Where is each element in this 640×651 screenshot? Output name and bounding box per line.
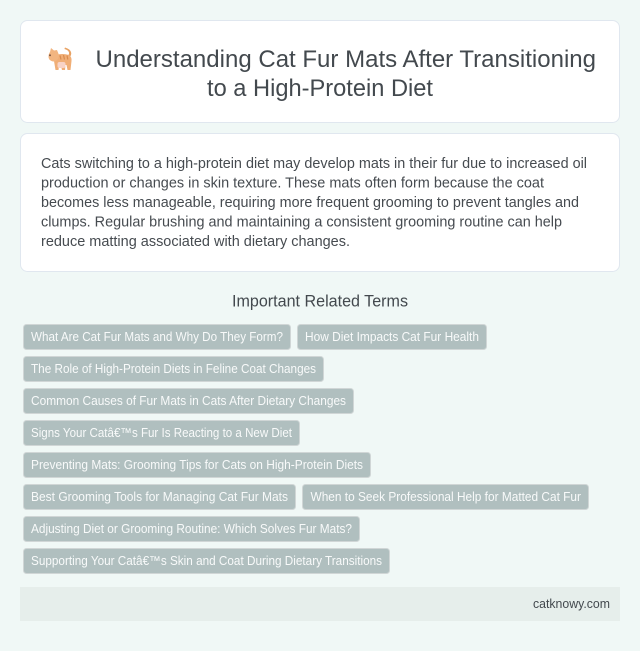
chip <box>24 548 390 574</box>
paragraph text: production or changes in skin texture. These mats often form because the coat <box>41 176 544 192</box>
footer bar <box>20 587 620 621</box>
chip: Supporting Your Catâ€™s Skin and Coat During Dietary Transitions <box>31 554 382 568</box>
paragraph text: clumps. Regular brushing and maintaining a consistent grooming routine can help <box>41 214 562 230</box>
title text: to a High-Protein Diet <box>207 75 433 102</box>
panel: title card <box>20 20 620 122</box>
panel: summary paragraph <box>20 134 620 272</box>
chip <box>24 356 324 382</box>
chip <box>24 484 296 510</box>
chip <box>24 324 290 350</box>
chip: How Diet Impacts Cat Fur Health <box>305 330 479 344</box>
paragraph text: reduce matting associated with dietary changes. <box>41 234 350 250</box>
chip: When to Seek Professional Help for Matted Cat Fur <box>310 490 581 504</box>
chip: Common Causes of Fur Mats in Cats After Dietary Changes <box>31 394 346 408</box>
chip <box>24 388 354 414</box>
title text <box>96 46 596 102</box>
chip <box>24 516 360 542</box>
paragraph text: Cats switching to a high-protein diet may develop mats in their fur due to increased oil <box>41 156 587 172</box>
chip <box>24 420 300 446</box>
chip: Signs Your Catâ€™s Fur Is Reacting to a New Diet <box>31 426 292 440</box>
chip <box>302 484 588 510</box>
chip: Best Grooming Tools for Managing Cat Fur Mats <box>31 490 288 504</box>
icon: cat <box>48 48 72 70</box>
chip <box>24 452 370 478</box>
paragraph text: becomes less manageable, requiring more frequent grooming to prevent tangles and <box>41 195 579 211</box>
title text: Understanding Cat Fur Mats After Transitioning <box>96 46 596 73</box>
footer site name: catknowy.com <box>533 597 610 611</box>
heading: important related terms: Important Related Terms <box>232 292 408 310</box>
chip: The Role of High-Protein Diets in Feline Coat Changes <box>31 362 316 376</box>
chip: What Are Cat Fur Mats and Why Do They Form? <box>31 330 283 344</box>
panel: related term chips <box>24 324 588 574</box>
chip: Adjusting Diet or Grooming Routine: Which Solves Fur Mats? <box>31 522 352 536</box>
paragraph text <box>41 156 587 250</box>
chip: Preventing Mats: Grooming Tips for Cats on High-Protein Diets <box>31 458 363 472</box>
chip <box>298 324 486 350</box>
